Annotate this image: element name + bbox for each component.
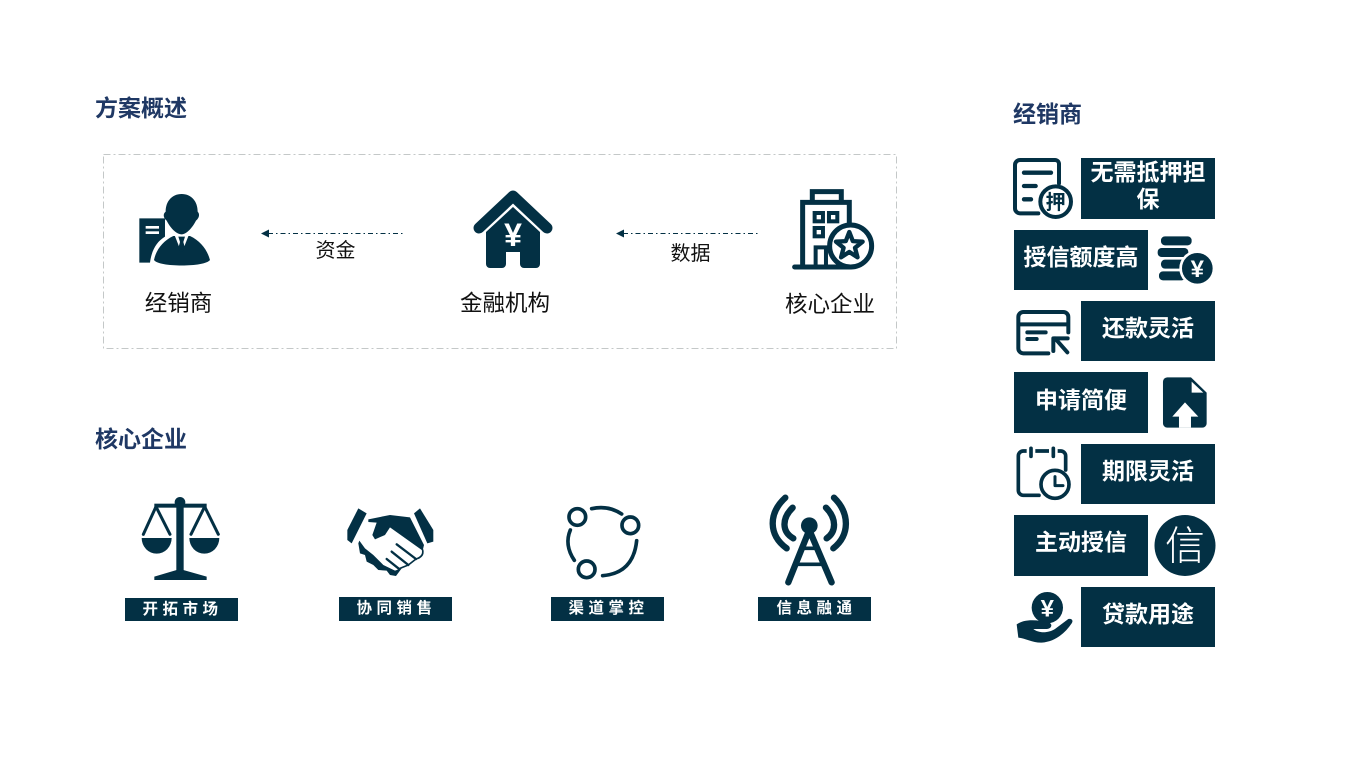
arrow: data — [616, 230, 758, 238]
benefit: 主动授信 — [1014, 515, 1216, 576]
icon: handshake — [347, 508, 433, 576]
box — [1081, 158, 1215, 219]
icon: coins with yen — [1158, 236, 1215, 286]
icon: signal tower — [773, 498, 846, 582]
label text: 信息融通 — [776, 598, 857, 617]
benefit: 授信额度高 — [1014, 230, 1215, 290]
icon: bank house with yen — [479, 196, 547, 268]
heading: 经销商: 经销商 — [1013, 101, 1082, 127]
label bar — [551, 597, 664, 621]
box — [1081, 444, 1215, 504]
box text: 贷款用途 — [1102, 601, 1194, 627]
icon: balance scales — [142, 497, 219, 580]
box — [1014, 230, 1148, 290]
icon: pledge document — [1015, 160, 1071, 217]
panel border — [104, 154, 896, 348]
label: 数据: 数据 — [670, 242, 710, 265]
benefit: 贷款用途 — [1017, 587, 1215, 647]
icon: hand holding coin — [1017, 592, 1072, 643]
icon: calendar clock — [1018, 447, 1069, 498]
box text: 期限灵活 — [1102, 458, 1194, 484]
benefit: 申请简便 — [1014, 372, 1207, 433]
label: 资金: 资金 — [316, 239, 356, 262]
label text: 渠道掌控 — [568, 598, 649, 617]
label text: 协同销售 — [356, 598, 437, 617]
box text line 2: 保 — [1136, 186, 1160, 212]
box text: 主动授信 — [1035, 529, 1127, 555]
feature: 开拓市场 — [125, 497, 238, 621]
icon: distributor person — [139, 194, 210, 265]
benefit: 期限灵活 — [1018, 444, 1215, 504]
label bar — [758, 597, 871, 621]
icon: credit badge: 信 — [1165, 524, 1205, 568]
icon: hand holding coin: ¥ — [1041, 596, 1055, 623]
panel: solution flow — [104, 154, 896, 348]
benefit: 还款灵活 — [1018, 301, 1215, 361]
icon: bank house with yen: ¥ — [504, 217, 522, 253]
box text: 授信额度高 — [1024, 244, 1138, 270]
benefit: 无需抵押担保 — [1015, 158, 1215, 219]
icon: card repayment — [1018, 312, 1068, 353]
arrow: funds — [261, 230, 403, 238]
feature: 协同销售 — [339, 508, 452, 621]
label: 核心企业: 核心企业 — [785, 292, 875, 317]
feature: 渠道掌控 — [551, 508, 664, 621]
box — [1081, 301, 1215, 361]
heading: 方案概述: 方案概述 — [95, 95, 187, 121]
icon: connected circles — [568, 508, 639, 578]
box — [1014, 372, 1148, 433]
icon: credit badge — [1154, 515, 1216, 576]
heading: 核心企业: 核心企业 — [95, 426, 187, 452]
box — [1081, 587, 1215, 647]
label bar — [125, 598, 238, 621]
box text: 无需抵押担 — [1090, 159, 1206, 185]
box text: 还款灵活 — [1102, 315, 1194, 341]
box text: 申请简便 — [1035, 387, 1127, 413]
icon: file upload — [1163, 377, 1207, 428]
label: 经销商: 经销商 — [145, 291, 212, 316]
icon: pledge document: 押 — [1046, 191, 1066, 214]
label: 金融机构: 金融机构 — [460, 291, 550, 316]
feature: 信息融通 — [758, 498, 871, 621]
box — [1014, 515, 1148, 576]
icon: coins with yen: ¥ — [1191, 256, 1205, 283]
label text: 开拓市场 — [142, 599, 223, 618]
icon: core enterprise building with star — [795, 192, 872, 267]
label bar — [339, 597, 452, 621]
